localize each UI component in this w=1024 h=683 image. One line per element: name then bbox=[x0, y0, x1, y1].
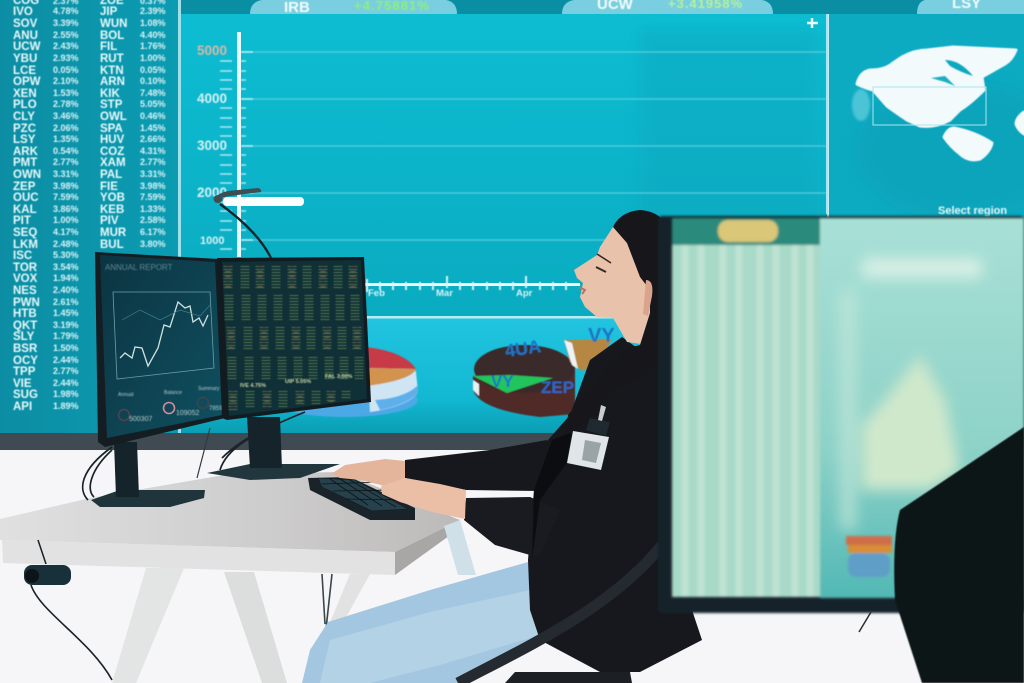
right monitor: FAL 3.00% bbox=[325, 374, 353, 380]
panel: ticker list: SUG bbox=[13, 389, 38, 401]
panel: ticker list: 2.44% bbox=[53, 378, 79, 388]
panel: ticker list: 0.05% bbox=[53, 65, 79, 75]
panel: ticker list: 1.50% bbox=[53, 343, 79, 353]
panel: ticker list: KAL bbox=[13, 204, 37, 216]
panel: ticker list: 3.31% bbox=[53, 169, 79, 179]
panel: ticker list: 0.46% bbox=[140, 111, 166, 121]
panel: ticker list: 3.98% bbox=[140, 181, 166, 191]
panel: ticker list: BSR bbox=[13, 343, 38, 355]
person: ID badge bbox=[567, 405, 610, 470]
panel: ticker list: 2.61% bbox=[53, 297, 79, 307]
panel: ticker list: LSY bbox=[13, 134, 36, 146]
left monitor bbox=[95, 252, 226, 447]
dark band below the wall screen bbox=[0, 433, 1024, 450]
panel: ticker list: OWN bbox=[13, 169, 41, 181]
person: jeans bbox=[302, 562, 545, 683]
panel: ticker list: 1.35% bbox=[53, 134, 79, 144]
panel: ticker list: HTB bbox=[13, 308, 37, 320]
chair base bbox=[505, 672, 632, 683]
right pie chart bbox=[473, 325, 615, 417]
panel: ticker list: 1.94% bbox=[53, 273, 79, 283]
panel: ticker list: 2.48% bbox=[53, 239, 79, 249]
panel: world map bbox=[826, 14, 1024, 434]
panel: ticker list: 3.98% bbox=[53, 181, 79, 191]
panel: ticker list: 0.54% bbox=[53, 146, 79, 156]
panel: ticker list: PWN bbox=[13, 297, 40, 309]
left monitor: Annual bbox=[118, 392, 134, 398]
panel: ticker list: COZ bbox=[100, 146, 124, 158]
right pie chart: ZEP bbox=[541, 378, 574, 397]
panel: ticker list: OPW bbox=[13, 76, 41, 88]
panel: ticker list: VOX bbox=[13, 273, 38, 285]
panel: ticker list: YOB bbox=[100, 192, 125, 204]
panel: ticker list: OUC bbox=[13, 192, 39, 204]
panel: ticker list: 2.39% bbox=[140, 6, 166, 16]
panel: ticker list: 5.30% bbox=[53, 250, 79, 260]
cable at foreground monitor bbox=[859, 612, 871, 632]
panel: ticker list: FIE bbox=[100, 181, 118, 193]
panel: ticker list: ARN bbox=[100, 76, 125, 88]
person: head and neck bbox=[574, 227, 655, 345]
left monitor: 109052 bbox=[176, 410, 199, 417]
panel: ticker list: 1.53% bbox=[53, 88, 79, 98]
panel: ticker list: OCY bbox=[13, 355, 38, 367]
panel: ticker list: 1.08% bbox=[140, 18, 166, 28]
panel: ticker list: BOL bbox=[100, 30, 124, 42]
panel: main line chart: 2000 bbox=[197, 185, 227, 200]
panel: ticker list: QKT bbox=[13, 320, 37, 332]
panel: ticker list: SPA bbox=[100, 123, 123, 135]
desk lamp bbox=[214, 188, 304, 258]
panel: ticker list: 1.89% bbox=[53, 401, 79, 411]
panel: ticker list: 1.76% bbox=[140, 41, 166, 51]
panel: ticker list: 6.17% bbox=[140, 227, 166, 237]
panel: ticker list: 2.77% bbox=[53, 366, 79, 376]
left monitor: ANNUAL REPORT bbox=[105, 263, 173, 272]
panel: ticker list: API bbox=[13, 401, 32, 413]
panel: ticker list: WUN bbox=[100, 18, 127, 30]
right pie chart: 4UA bbox=[504, 336, 542, 361]
panel: ticker list: FIL bbox=[100, 41, 117, 53]
left monitor: Balance bbox=[164, 390, 182, 396]
panel: ticker list: KTN bbox=[100, 65, 124, 77]
panel: ticker list: LKM bbox=[13, 239, 38, 251]
panel: ticker list bbox=[0, 0, 181, 434]
panel: main line chart: 5000 bbox=[197, 43, 227, 58]
person: hair bbox=[566, 210, 670, 434]
panel: ticker list: ANU bbox=[13, 30, 38, 42]
keyboard bbox=[308, 477, 415, 520]
panel: ticker list: SEQ bbox=[13, 227, 37, 239]
panel: ticker list: 7.59% bbox=[53, 192, 79, 202]
panel: ticker list: 2.06% bbox=[53, 123, 79, 133]
panel: ticker list: 2.10% bbox=[53, 76, 79, 86]
right monitor: IVE 4.75% bbox=[240, 383, 266, 389]
right monitor stand bbox=[197, 412, 340, 480]
panel: ticker list: PMT bbox=[13, 157, 37, 169]
person: jacket bbox=[405, 337, 702, 672]
cables and camera under desk bbox=[24, 540, 112, 680]
panel: main line chart bbox=[181, 14, 827, 317]
panel: ticker list: JIP bbox=[100, 6, 118, 18]
panel: ticker list: 2.40% bbox=[53, 285, 79, 295]
panel: ticker list: 3.19% bbox=[53, 320, 79, 330]
panel: ticker list: BUL bbox=[100, 239, 124, 251]
panel: ticker list: 1.00% bbox=[140, 53, 166, 63]
panel: ticker list: RUT bbox=[100, 53, 124, 65]
panel: main line chart: Apr bbox=[516, 288, 533, 299]
person: hands bbox=[331, 459, 466, 519]
panel: ticker list: 2.58% bbox=[140, 215, 166, 225]
panel: ticker list: 1.45% bbox=[140, 123, 166, 133]
panel: ticker list: 4.17% bbox=[53, 227, 79, 237]
panel: ticker list: PAL bbox=[100, 169, 122, 181]
panel: ticker list: XEN bbox=[13, 88, 37, 100]
panel: top ticker bar bbox=[181, 0, 1024, 28]
panel: ticker list: TPP bbox=[13, 366, 36, 378]
panel: ticker list: PZC bbox=[13, 123, 36, 135]
panel: ticker list: IVO bbox=[13, 6, 33, 18]
panel: ticker list: XAM bbox=[100, 157, 126, 169]
panel: ticker list: 2.66% bbox=[140, 134, 166, 144]
panel: ticker list: PLO bbox=[13, 99, 37, 111]
panel: ticker list: HUV bbox=[100, 134, 125, 146]
panel: ticker list: TOR bbox=[13, 262, 38, 274]
left pie chart bbox=[272, 347, 418, 417]
panel: lower pie chart area bbox=[181, 316, 827, 434]
panel: ticker list: UCW bbox=[13, 41, 41, 53]
right pie chart: VY bbox=[588, 325, 615, 347]
right monitor: UIP 5.05% bbox=[285, 379, 311, 385]
foreground blurred person shoulder bbox=[894, 427, 1024, 683]
panel: ticker list: YBU bbox=[13, 53, 37, 65]
panel: ticker list: 2.55% bbox=[53, 30, 79, 40]
panel: ticker list: 1.33% bbox=[140, 204, 166, 214]
panel: main line chart: Mar bbox=[436, 288, 453, 299]
panel: ticker list: 3.86% bbox=[53, 204, 79, 214]
panel: ticker list: KEB bbox=[100, 204, 124, 216]
panel: ticker list: 3.80% bbox=[140, 239, 166, 249]
panel: ticker list: ISC bbox=[13, 250, 32, 262]
panel: ticker list: OWL bbox=[100, 111, 127, 123]
panel: main line chart: 3000 bbox=[197, 138, 227, 153]
panel: main line chart: 1000 bbox=[200, 235, 224, 247]
panel: ticker list: 5.05% bbox=[140, 99, 166, 109]
panel: ticker list: 3.46% bbox=[53, 111, 79, 121]
panel: ticker list: 4.31% bbox=[140, 146, 166, 156]
panel: ticker list: 4.78% bbox=[53, 6, 79, 16]
left monitor: 78597 bbox=[209, 406, 226, 412]
panel: ticker list: ZEP bbox=[13, 181, 36, 193]
panel: ticker list: NES bbox=[13, 285, 37, 297]
panel: ticker list: PIV bbox=[100, 215, 119, 227]
panel: ticker list: 2.93% bbox=[53, 53, 79, 63]
panel: ticker list: 2.43% bbox=[53, 41, 79, 51]
left monitor: 500307 bbox=[129, 416, 152, 423]
left monitor: Summary bbox=[198, 386, 220, 392]
panel: ticker list: STP bbox=[100, 99, 123, 111]
left monitor stand bbox=[83, 442, 205, 507]
panel: ticker list: 3.54% bbox=[53, 262, 79, 272]
panel: ticker list: PIT bbox=[13, 215, 31, 227]
panel: ticker list: 0.05% bbox=[140, 65, 166, 75]
panel: ticker list: 7.59% bbox=[140, 192, 166, 202]
panel: ticker list: 0.10% bbox=[140, 76, 166, 86]
right pie chart: VY bbox=[491, 372, 514, 391]
panel: ticker list: 1.98% bbox=[53, 389, 79, 399]
panel: ticker list: 1.00% bbox=[53, 215, 79, 225]
panel: ticker list: 7.48% bbox=[140, 88, 166, 98]
right monitor bbox=[217, 257, 371, 420]
panel: ticker list: 1.79% bbox=[53, 331, 79, 341]
panel: ticker list: 2.78% bbox=[53, 99, 79, 109]
panel: ticker list: 2.77% bbox=[140, 157, 166, 167]
panel: ticker list: 4.40% bbox=[140, 30, 166, 40]
panel: ticker list: KIK bbox=[100, 88, 120, 100]
desk bbox=[0, 472, 476, 683]
panel: ticker list: 1.45% bbox=[53, 308, 79, 318]
panel: ticker list: SOV bbox=[13, 18, 38, 30]
panel: main line chart: Feb bbox=[368, 288, 385, 299]
panel: ticker list: VIE bbox=[13, 378, 32, 390]
chair arm bbox=[458, 545, 662, 683]
panel: ticker list: LCE bbox=[13, 65, 36, 77]
panel: ticker list: CLY bbox=[13, 111, 35, 123]
panel: ticker list: 3.31% bbox=[140, 169, 166, 179]
panel: ticker list: 3.39% bbox=[53, 18, 79, 28]
panel: ticker list: 2.77% bbox=[53, 157, 79, 167]
panel: ticker list: ARK bbox=[13, 146, 39, 158]
panel: ticker list: 2.44% bbox=[53, 355, 79, 365]
panel: ticker list: MUR bbox=[100, 227, 127, 239]
panel: world map: Select region bbox=[938, 205, 1007, 217]
panel: main line chart: 4000 bbox=[197, 91, 227, 106]
panel: ticker list: SLY bbox=[13, 331, 35, 343]
foreground blurred monitor bbox=[658, 216, 1024, 613]
